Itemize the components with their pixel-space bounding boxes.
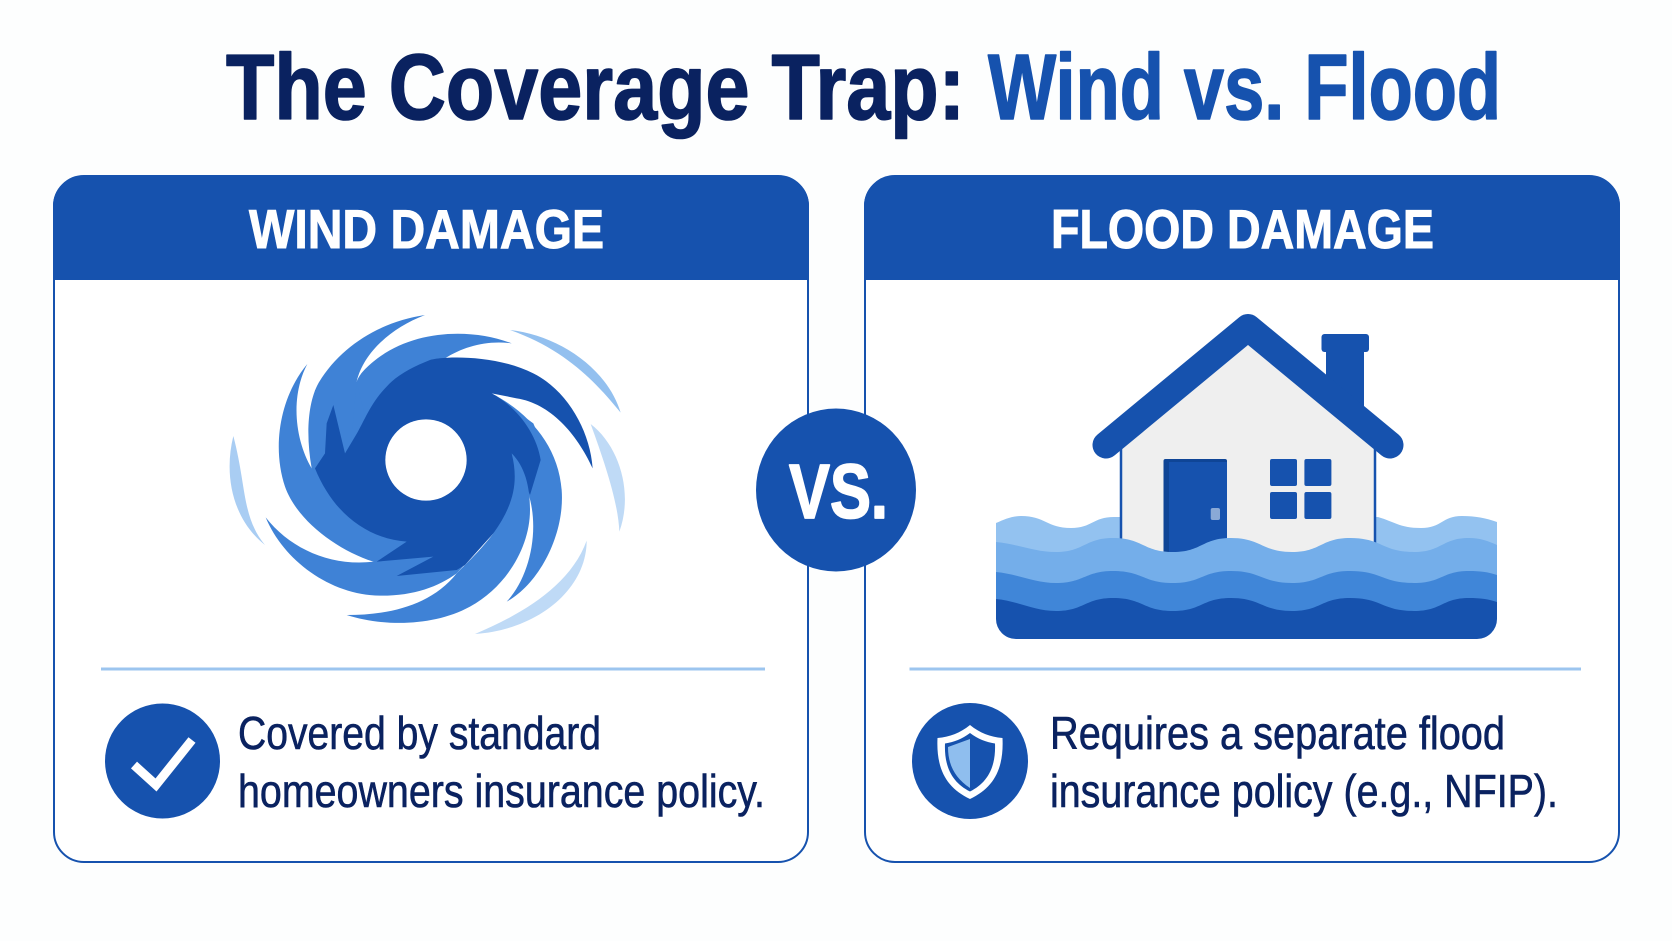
text: flood coverage: Requires a separate flood <box>1050 707 1505 759</box>
badge: vs <box>756 408 916 572</box>
illustration: flooded house <box>996 328 1497 639</box>
divider <box>101 668 765 670</box>
title: The Coverage Trap: <box>226 35 965 139</box>
badge: vs: VS. <box>789 449 888 535</box>
icon: shield badge <box>912 703 1028 819</box>
title: Wind vs. Flood <box>988 35 1501 139</box>
house walls <box>1122 345 1374 575</box>
panel: flood damage <box>864 176 1620 862</box>
base body <box>312 358 562 573</box>
divider <box>910 668 1581 670</box>
panel: wind damage <box>53 176 809 862</box>
text: wind coverage: Covered by standard <box>238 707 601 759</box>
icon: check mark badge <box>105 704 220 818</box>
window <box>1270 459 1331 519</box>
text: flood coverage <box>1050 707 1558 817</box>
icon: hurricane <box>230 315 625 634</box>
heading: flood damage: FLOOD DAMAGE <box>1051 198 1434 260</box>
heading: flood damage <box>864 176 1620 280</box>
water: back wave <box>996 516 1497 560</box>
chimney <box>1322 334 1369 412</box>
heading: wind damage <box>53 176 809 280</box>
water: front waves <box>996 538 1497 639</box>
text: wind coverage <box>238 707 765 817</box>
title <box>226 35 1501 139</box>
text: wind coverage: homeowners insurance policy. <box>238 765 765 817</box>
text: flood coverage: insurance policy (e.g., NFIP). <box>1050 765 1558 817</box>
heading: wind damage: WIND DAMAGE <box>249 198 604 260</box>
roof <box>1106 328 1390 445</box>
door <box>1164 459 1227 554</box>
